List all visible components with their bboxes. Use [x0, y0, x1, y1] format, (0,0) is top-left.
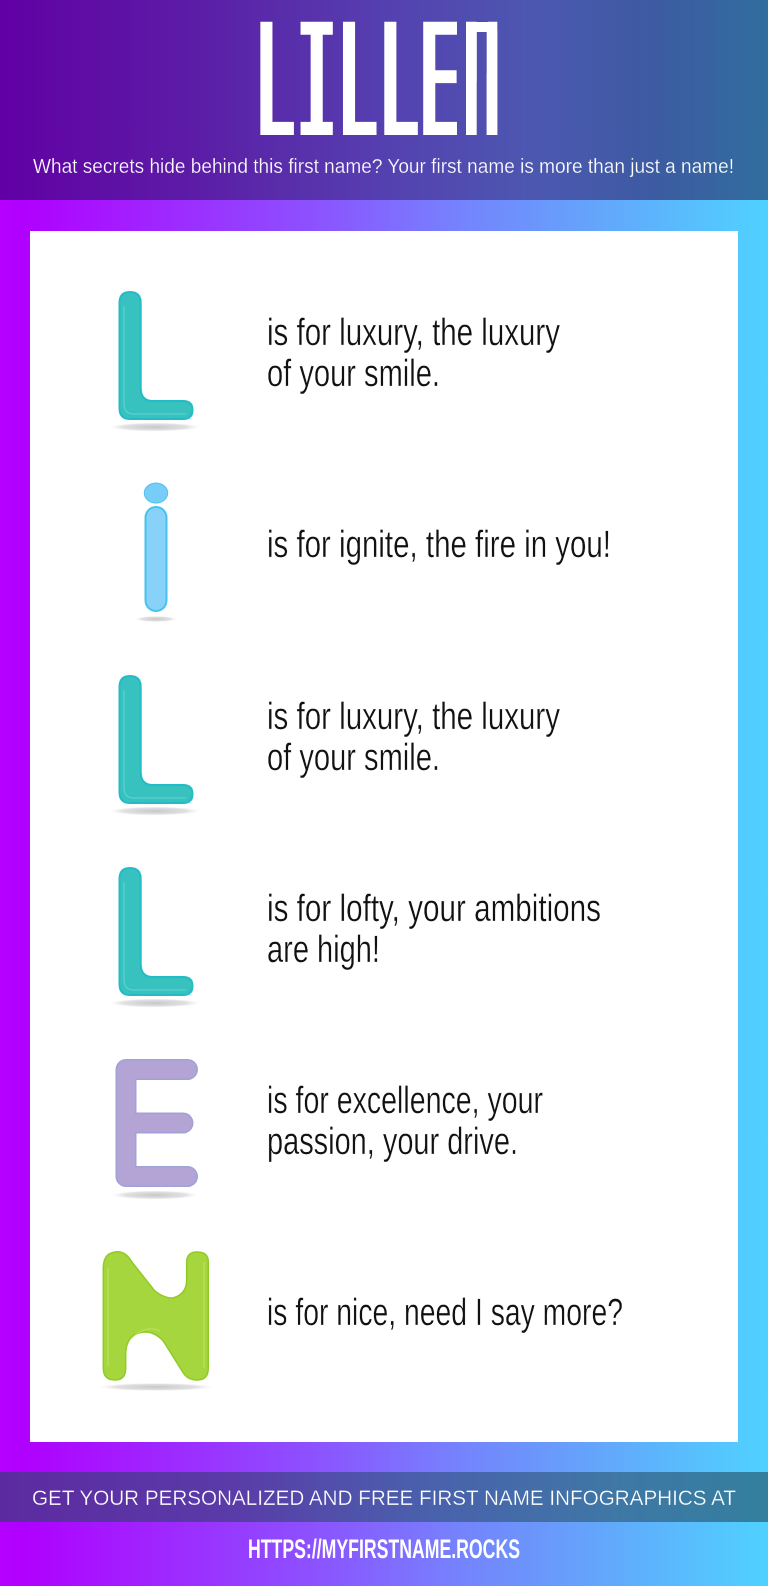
text: E meaning — [267, 1080, 543, 1163]
text: L meaning: of your smile. — [267, 737, 440, 779]
icon: teal L — [109, 675, 201, 816]
text: N meaning: is for nice, need I say more? — [267, 1292, 623, 1334]
footer call to action: GET YOUR PERSONALIZED AND FREE FIRST NAME INFOGRAPHICS AT — [32, 1487, 736, 1510]
icon: blue i — [135, 483, 177, 622]
text: E meaning: passion, your drive. — [267, 1121, 518, 1163]
text: E meaning: is for excellence, your — [267, 1080, 543, 1122]
subtitle: What secrets hide behind this first name? Your first name is more than just a name! — [33, 155, 734, 178]
row 6: letter N — [98, 1252, 623, 1391]
row 5: letter E — [111, 1070, 543, 1200]
icon: green N — [98, 1252, 214, 1391]
row 3: letter L — [109, 675, 560, 816]
text: i meaning: is for ignite, the fire in you! — [267, 524, 611, 566]
footer band — [0, 1472, 768, 1522]
text: L meaning: is for luxury, the luxury — [267, 696, 560, 738]
text: L meaning — [267, 312, 560, 395]
text: L meaning — [267, 696, 560, 779]
text: L meaning: is for lofty, your ambitions — [267, 888, 601, 930]
text: L meaning — [267, 888, 601, 971]
title N arch — [466, 22, 497, 135]
footer url: HTTPS://MYFIRSTNAME.ROCKS — [248, 1534, 520, 1564]
text: L meaning: is for luxury, the luxury — [267, 312, 560, 354]
icon: teal L — [109, 291, 201, 432]
header band — [0, 0, 768, 200]
white content panel — [30, 231, 738, 1442]
icon: purple E — [111, 1070, 199, 1200]
row 1: letter L — [109, 291, 560, 432]
row 2: letter i — [135, 483, 611, 622]
row 4: letter L — [109, 867, 601, 1008]
text: L meaning: are high! — [267, 929, 380, 971]
icon: teal L — [109, 867, 201, 1008]
text: L meaning: of your smile. — [267, 353, 440, 395]
